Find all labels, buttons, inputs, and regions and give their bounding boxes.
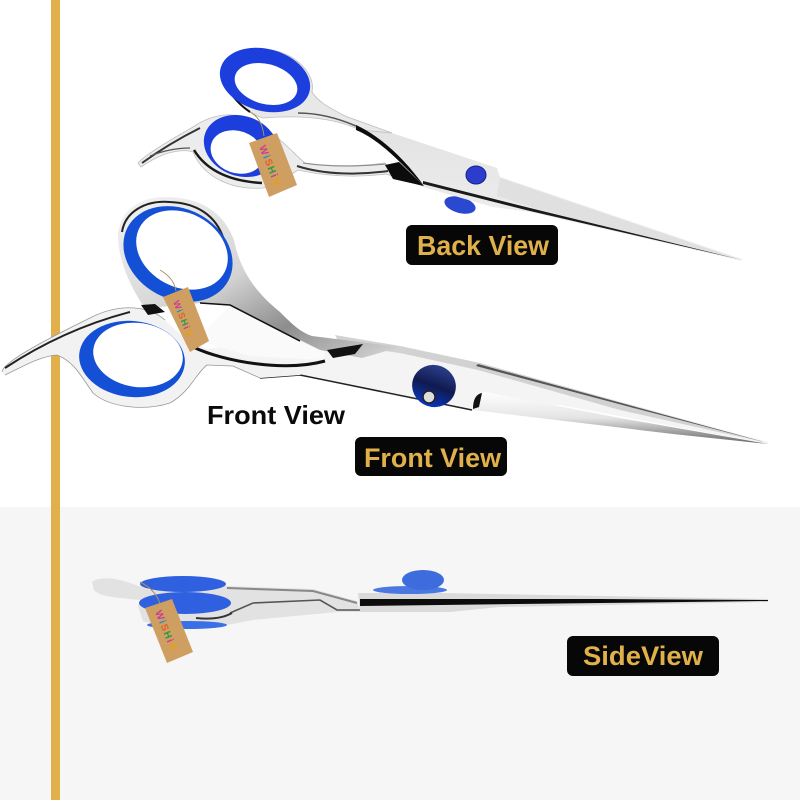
- hang tag: back view: WiSHiN: [256, 144, 283, 188]
- handles: side view: [92, 578, 360, 628]
- upper handle: back view: [221, 49, 392, 133]
- text: front view caption: Front View: [207, 400, 346, 430]
- hang tag: front view: [160, 270, 209, 352]
- blade: front view: [200, 335, 768, 444]
- pivot knob: front view: [406, 359, 462, 413]
- pivot screw: back view: [466, 166, 486, 184]
- blade: back view: [357, 122, 742, 261]
- label: back view: Back View: [417, 230, 549, 261]
- background: lower grey band: [0, 507, 800, 800]
- pivot knob: side view: [373, 570, 447, 594]
- label: front view: [355, 437, 507, 476]
- label: side view: [567, 636, 719, 676]
- hang tag: front view: WiSHiN: [171, 299, 195, 338]
- blade: side view: [358, 593, 768, 612]
- scissors: back view: [138, 38, 742, 261]
- lower handle and tang: back view: [138, 115, 423, 188]
- blue underside of thumb rest: [442, 193, 478, 217]
- gold vertical bar: [51, 0, 60, 800]
- label: front view: Front View: [364, 443, 502, 473]
- hang tag: side view: WiSHiN: [152, 609, 179, 653]
- upper handle: front view: [118, 197, 400, 358]
- hang tag: side view: [140, 582, 193, 663]
- scissors: side view: [92, 570, 768, 663]
- hang tag: back view: [249, 112, 297, 197]
- lower handle and tang: front view: [2, 308, 325, 407]
- lower blade: front view: [473, 392, 768, 444]
- label: side view: SideView: [583, 641, 704, 671]
- scissors: front view: [2, 188, 768, 444]
